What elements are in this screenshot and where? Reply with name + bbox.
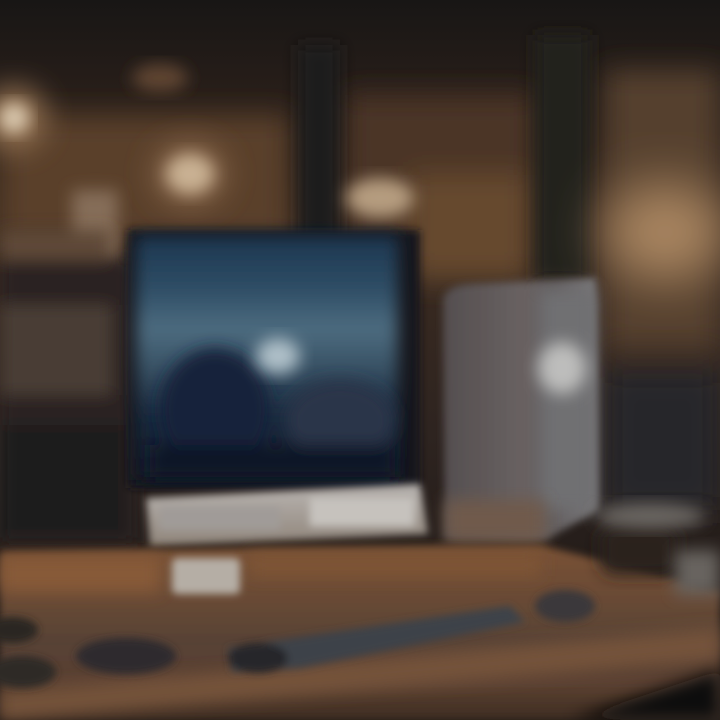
- monitor: screen and bezel: [128, 230, 420, 488]
- background: warm glow on right wall: [603, 182, 720, 282]
- monitor: dark mountains on screen: [150, 348, 395, 477]
- lights: blurred ceiling lamps: [0, 64, 414, 270]
- desk: dark front corner shadow: [570, 670, 720, 720]
- desk: wood highlight bands: [0, 554, 720, 720]
- objects: dark items on left edge: [0, 617, 56, 688]
- monitor: light chin and stand: [146, 484, 428, 546]
- keyboard: dark slate: [228, 606, 525, 673]
- object: white paper on desk: [172, 558, 240, 594]
- objects: cup and items at right: [595, 503, 720, 595]
- background: dark pillars: [298, 35, 590, 280]
- mouse: small dark device: [76, 590, 595, 674]
- shelf: left side furniture: [0, 230, 135, 543]
- background: warm wall panels: [0, 70, 720, 510]
- desk: wooden tabletop: [0, 545, 720, 720]
- tower: computer case: [443, 278, 598, 542]
- monitor: bright highlight on screen: [256, 338, 300, 374]
- monitor: screen image: [136, 236, 398, 480]
